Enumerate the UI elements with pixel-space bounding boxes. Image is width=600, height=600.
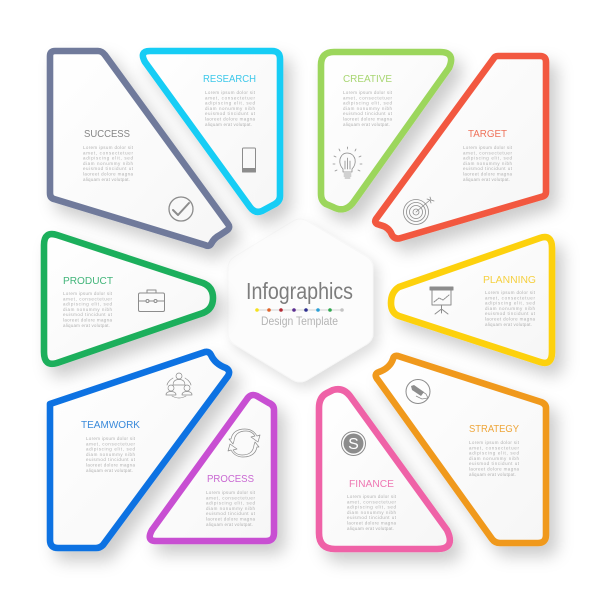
teamwork heading: TEAMWORK (81, 419, 140, 431)
panel: target (375, 56, 546, 239)
target body: amet, consectetuer (463, 150, 512, 155)
product body: amet, consectetuer (63, 296, 112, 301)
process body: diam nonummy nibh (206, 506, 255, 511)
icon: dollar coin: S (348, 436, 359, 453)
research body: Lorem ipsum dolor sit (205, 90, 256, 95)
panel: research (143, 51, 280, 212)
process heading: PROCESS (207, 473, 254, 485)
finance body: amet, consectetuer (347, 499, 396, 504)
teamwork body: euismod tincidunt ut (86, 457, 136, 462)
success body: amet, consectetuer (83, 150, 134, 155)
target body: aliquam erat volutpat. (463, 177, 510, 182)
success body (83, 145, 134, 182)
strategy heading: STRATEGY (469, 423, 519, 435)
finance body: Lorem ipsum dolor sit (347, 494, 397, 499)
panel: strategy (376, 356, 546, 543)
creative body: aliquam erat volutpat. (343, 122, 390, 127)
success body: laoreet dolore magna (83, 172, 133, 176)
finance body: euismod tincidunt ut (347, 515, 397, 520)
teamwork body: laoreet dolore magna (86, 462, 135, 468)
center title: Infographics (246, 278, 353, 304)
icon: target (404, 197, 434, 224)
teamwork body (86, 436, 136, 473)
process body: amet, consectetuer (206, 495, 256, 500)
panel: product (44, 234, 213, 364)
strategy body: laoreet dolore magna (469, 466, 519, 472)
icon: light bulb (333, 147, 362, 178)
planning body: diam nonummy nibh (485, 306, 535, 311)
planning body: euismod tincidunt ut (485, 311, 536, 316)
research body: adipiscing elit, sed (205, 101, 255, 106)
panel: process (150, 395, 274, 541)
product heading: PRODUCT (63, 275, 114, 287)
success outline (50, 51, 229, 246)
strategy body: euismod tincidunt ut (469, 461, 520, 466)
colored dot line (255, 308, 344, 312)
product outline (44, 234, 213, 364)
teamwork body: Lorem ipsum dolor sit (86, 436, 136, 441)
creative heading: CREATIVE (343, 73, 392, 85)
success body: diam nonummy nibh (83, 161, 133, 166)
panel: success (50, 51, 229, 246)
target body: laoreet dolore magna (463, 172, 512, 176)
success body: Lorem ipsum dolor sit (83, 145, 134, 150)
teamwork body: aliquam erat volutpat. (86, 468, 133, 473)
strategy body: diam nonummy nibh (469, 456, 519, 461)
icon: dollar coin (342, 432, 366, 456)
finance body: adipiscing elit, sed (347, 505, 396, 510)
panel: finance (319, 389, 450, 549)
product body: aliquam erat volutpat. (63, 323, 110, 328)
product body: laoreet dolore magna (63, 318, 112, 322)
teamwork body: amet, consectetuer (86, 441, 136, 446)
creative body: laoreet dolore magna (343, 116, 392, 122)
strategy body (469, 440, 520, 477)
research heading: RESEARCH (203, 73, 256, 85)
process body: Lorem ipsum dolor sit (206, 490, 256, 495)
product body: euismod tincidunt ut (63, 312, 113, 317)
research body: euismod tincidunt ut (205, 111, 256, 116)
planning body: aliquam erat volutpat. (485, 322, 532, 327)
finance body: laoreet dolore magna (347, 520, 396, 526)
planning body: Lorem ipsum dolor sit (485, 290, 536, 295)
process body (206, 490, 256, 527)
finance body: diam nonummy nibh (347, 510, 396, 515)
icon: check circle (169, 197, 193, 221)
success heading: SUCCESS (84, 128, 130, 140)
product body: Lorem ipsum dolor sit (63, 291, 113, 296)
product body: adipiscing elit, sed (63, 302, 112, 307)
icon: strategy arrows (406, 380, 430, 404)
strategy body: Lorem ipsum dolor sit (469, 440, 520, 445)
icon: briefcase (138, 290, 164, 312)
research body: aliquam erat volutpat. (205, 122, 252, 127)
planning body: laoreet dolore magna (485, 316, 535, 322)
creative body: adipiscing elit, sed (343, 101, 392, 106)
product body (63, 291, 113, 328)
planning outline (391, 237, 552, 363)
finance heading: FINANCE (349, 478, 394, 490)
research body (205, 90, 256, 127)
strategy body: aliquam erat volutpat. (469, 472, 516, 477)
process body: adipiscing elit, sed (206, 501, 255, 506)
success body: adipiscing elit, sed (83, 156, 133, 161)
product body: diam nonummy nibh (63, 307, 112, 312)
process outline (150, 395, 274, 541)
icon: team (166, 373, 192, 398)
creative outline (321, 52, 451, 209)
creative body (343, 90, 393, 127)
icon: cycle arrows (228, 429, 260, 457)
finance outline (319, 389, 450, 549)
planning body: adipiscing elit, sed (485, 301, 535, 306)
research body: laoreet dolore magna (205, 116, 255, 122)
teamwork body: diam nonummy nibh (86, 452, 135, 457)
target body: diam nonummy nibh (463, 161, 512, 166)
icon: phone (242, 148, 256, 172)
teamwork outline (50, 352, 229, 548)
target heading: TARGET (468, 128, 508, 140)
icon: presentation board (430, 287, 453, 314)
teamwork body: adipiscing elit, sed (86, 447, 135, 452)
target body: euismod tincidunt ut (463, 166, 513, 171)
process body: euismod tincidunt ut (206, 511, 256, 516)
strategy body: adipiscing elit, sed (469, 451, 519, 456)
process body: laoreet dolore magna (206, 516, 255, 522)
success body: aliquam erat volutpat. (83, 177, 130, 182)
success body: euismod tincidunt ut (83, 166, 134, 171)
planning body: amet, consectetuer (485, 295, 536, 300)
research body: amet, consectetuer (205, 95, 256, 100)
panel: planning (391, 237, 552, 363)
target body: Lorem ipsum dolor sit (463, 145, 513, 150)
panel: creative (321, 52, 451, 209)
creative body: euismod tincidunt ut (343, 111, 393, 116)
creative body: diam nonummy nibh (343, 106, 392, 111)
strategy outline (376, 356, 546, 543)
planning heading: PLANNING (483, 274, 536, 286)
target outline (375, 56, 546, 239)
research outline (143, 51, 280, 212)
research body: diam nonummy nibh (205, 106, 255, 111)
planning body (485, 290, 536, 327)
process body: aliquam erat volutpat. (206, 522, 253, 527)
finance body (347, 494, 397, 531)
finance body: aliquam erat volutpat. (347, 526, 394, 531)
center hexagon (228, 219, 373, 382)
strategy body: amet, consectetuer (469, 445, 520, 450)
creative body: Lorem ipsum dolor sit (343, 90, 393, 95)
target body (463, 145, 513, 182)
target body: adipiscing elit, sed (463, 156, 512, 161)
panel: teamwork (50, 352, 229, 548)
creative body: amet, consectetuer (343, 95, 392, 100)
center subtitle: Design Template (261, 314, 338, 328)
